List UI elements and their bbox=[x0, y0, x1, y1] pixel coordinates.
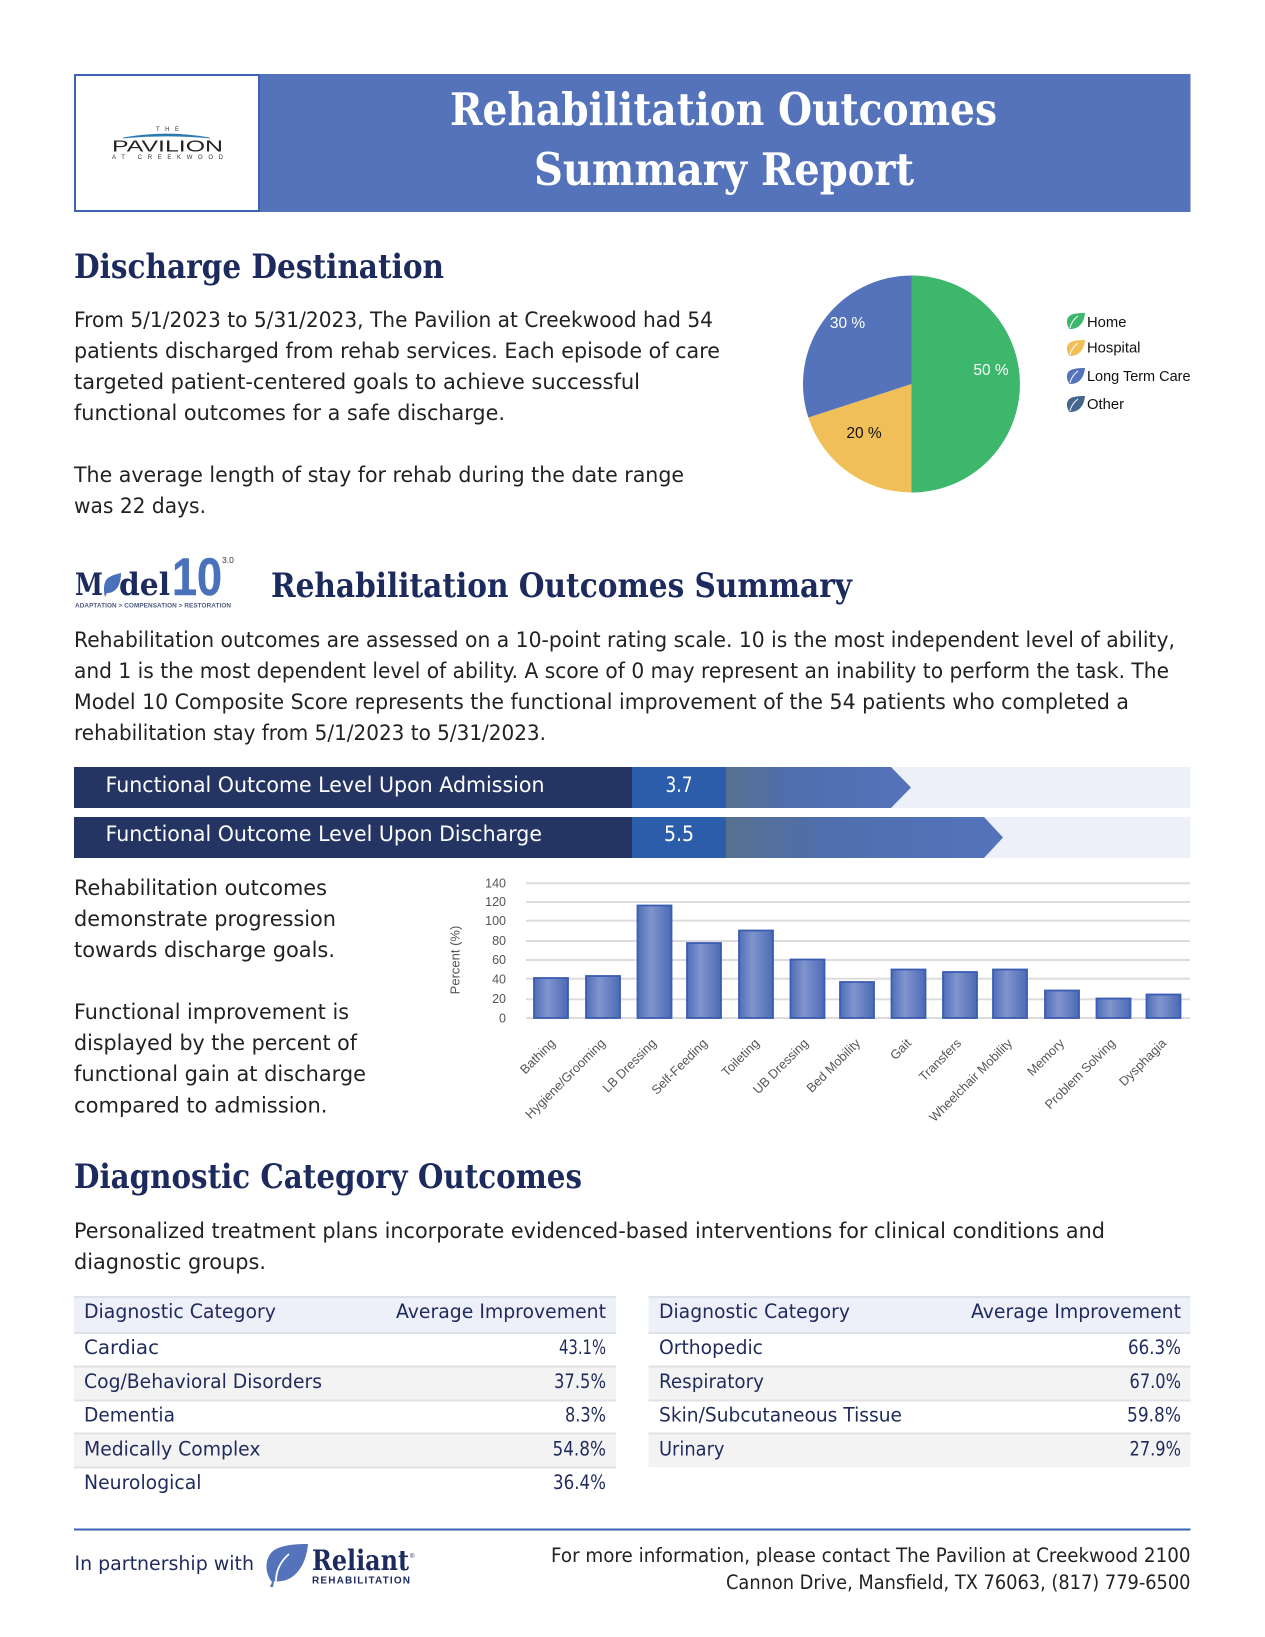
progress bar: discharge level: Functional Outcome Level Upon Discharge bbox=[106, 822, 542, 846]
table: diagnostic categories left: 36.4% bbox=[553, 1471, 606, 1494]
table: diagnostic categories right: Respiratory bbox=[659, 1370, 764, 1393]
x-axis labels: Gait bbox=[887, 1035, 914, 1063]
logo: Reliant Rehabilitation: ® bbox=[410, 1553, 415, 1560]
logo panel: The Pavilion at Creekwood: AT CREEKWOOD bbox=[112, 155, 224, 161]
y-axis labels: 120 bbox=[485, 895, 506, 909]
y-axis labels: 40 bbox=[492, 972, 506, 986]
legend item: Other: Other bbox=[1087, 397, 1124, 413]
text block: discharge summary bbox=[73, 308, 720, 518]
table: diagnostic categories right: 27.9% bbox=[1130, 1438, 1181, 1460]
text block: discharge summary: The average length of stay for rehab during the date range bbox=[73, 463, 684, 487]
logo: Model 10: 3.0 bbox=[222, 555, 234, 565]
y-axis labels bbox=[485, 876, 506, 1026]
logo: Model 10: 10 bbox=[172, 548, 222, 607]
table: diagnostic categories left: Diagnostic Category bbox=[84, 1300, 276, 1323]
logo panel: The Pavilion at Creekwood bbox=[75, 75, 259, 211]
text block: rating scale description: rehabilitation stay from 5/1/2023 to 5/31/2023. bbox=[74, 721, 546, 745]
text block: progression: compared to admission. bbox=[74, 1094, 328, 1118]
report title: Summary Report bbox=[534, 143, 914, 196]
table: diagnostic categories left: Average Improvement bbox=[396, 1300, 606, 1323]
x-axis labels: Bathing bbox=[517, 1036, 558, 1077]
text block: progression: Rehabilitation outcomes bbox=[74, 876, 327, 900]
progress bar: admission level: Functional Outcome Level Upon Admission bbox=[106, 773, 544, 797]
table: diagnostic categories right: Average Improvement bbox=[971, 1300, 1181, 1323]
footer: partnership: In partnership with bbox=[74, 1552, 254, 1575]
text block: progression: demonstrate progression bbox=[74, 907, 336, 931]
x-axis labels: UB Dressing bbox=[750, 1036, 811, 1097]
table: diagnostic categories right: Orthopedic bbox=[659, 1336, 763, 1359]
heading: Rehabilitation Outcomes Summary: Rehabilitation Outcomes Summary bbox=[271, 566, 853, 606]
footer: contact information: Cannon Drive, Mansfield, TX 76063, (817) 779-6500 bbox=[726, 1571, 1190, 1594]
text block: treatment plans bbox=[74, 1219, 1105, 1274]
report title: Rehabilitation Outcomes bbox=[450, 83, 997, 136]
legend item: Home: Home bbox=[1087, 315, 1126, 331]
progress bar: admission level: 3.7 bbox=[666, 773, 692, 797]
text block: discharge summary: targeted patient-centered goals to achieve successful bbox=[74, 370, 640, 394]
table: diagnostic categories left: Cog/Behavioral Disorders bbox=[84, 1370, 322, 1393]
y-axis labels: 0 bbox=[499, 1012, 506, 1026]
table: diagnostic categories left bbox=[74, 1296, 616, 1494]
text block: treatment plans: Personalized treatment plans incorporate evidenced-based interventions for clinical conditions and bbox=[74, 1219, 1105, 1243]
table: diagnostic categories left: 37.5% bbox=[554, 1370, 606, 1393]
text block: progression: functional gain at discharge bbox=[74, 1062, 366, 1086]
x-axis labels: Hygiene/Grooming bbox=[522, 1036, 608, 1122]
progress bar: admission level bbox=[74, 767, 1190, 808]
footer: contact information: For more information, please contact The Pavilion at Creekwood 2100 bbox=[551, 1544, 1190, 1567]
y-axis labels: 80 bbox=[492, 934, 506, 948]
text block: discharge summary: functional outcomes for a safe discharge. bbox=[74, 401, 505, 425]
progress bar: discharge level: 5.5 bbox=[664, 822, 694, 846]
bar chart: functional gain percent by task bbox=[448, 876, 1190, 1125]
pie chart: discharge destination bbox=[803, 276, 1020, 492]
y-axis labels: 140 bbox=[485, 876, 506, 890]
text block: discharge summary: was 22 days. bbox=[74, 494, 206, 518]
bars bbox=[534, 906, 1180, 1018]
x-axis labels: Toileting bbox=[718, 1036, 762, 1079]
footer: partnership bbox=[74, 1544, 415, 1587]
table: diagnostic categories left: 8.3% bbox=[565, 1404, 606, 1426]
table: diagnostic categories right bbox=[648, 1296, 1190, 1467]
table: diagnostic categories left: Neurological bbox=[84, 1471, 202, 1494]
pie chart: discharge destination: 30 % bbox=[830, 315, 865, 332]
y-axis labels: 20 bbox=[492, 992, 506, 1006]
table: diagnostic categories right: Urinary bbox=[659, 1438, 724, 1460]
legend: discharge destination bbox=[1067, 313, 1190, 414]
table: diagnostic categories right: Skin/Subcutaneous Tissue bbox=[659, 1404, 902, 1426]
logo panel: The Pavilion at Creekwood: PAVILION bbox=[112, 138, 223, 156]
text block: treatment plans: diagnostic groups. bbox=[74, 1250, 266, 1274]
x-axis labels bbox=[517, 1035, 1170, 1125]
table: diagnostic categories left: 43.1% bbox=[559, 1336, 606, 1359]
heading: Discharge Destination: Discharge Destination bbox=[74, 247, 444, 287]
text block: discharge summary: From 5/1/2023 to 5/31/2023, The Pavilion at Creekwood had 54 bbox=[74, 308, 713, 332]
text block: discharge summary: patients discharged from rehab services. Each episode of care bbox=[74, 339, 720, 363]
y-axis title: Percent (%) bbox=[448, 926, 462, 994]
logo panel: The Pavilion at Creekwood: THE bbox=[156, 127, 179, 133]
logo: Model 10: M bbox=[75, 567, 103, 603]
table: diagnostic categories right: Diagnostic Category bbox=[659, 1300, 850, 1323]
table: diagnostic categories right: 67.0% bbox=[1130, 1370, 1181, 1393]
x-axis labels: Self-Feeding bbox=[648, 1036, 710, 1097]
progress bar: discharge level bbox=[74, 817, 1190, 858]
icon: Reliant leaf bbox=[266, 1544, 308, 1587]
x-axis labels: Transfers bbox=[916, 1036, 964, 1084]
x-axis labels: Memory bbox=[1024, 1035, 1068, 1079]
x-axis labels: Bed Mobility bbox=[803, 1035, 864, 1095]
heading: Diagnostic Category Outcomes: Diagnostic Category Outcomes bbox=[74, 1157, 582, 1197]
text block: progression: Functional improvement is bbox=[74, 1000, 349, 1024]
text block: progression: towards discharge goals. bbox=[74, 938, 335, 962]
logo: Model 10 bbox=[75, 548, 234, 610]
text block: rating scale description bbox=[74, 628, 1175, 745]
legend item: Hospital: Hospital bbox=[1087, 340, 1140, 356]
logo: Reliant Rehabilitation: REHABILITATION bbox=[312, 1576, 410, 1586]
legend item: Long Term Care: Long Term Care bbox=[1087, 369, 1190, 385]
text block: rating scale description: Model 10 Composite Score represents the functional improvement of the 54 patients who completed a bbox=[74, 690, 1129, 714]
pie chart: discharge destination: 20 % bbox=[846, 425, 882, 442]
text block: progression bbox=[74, 876, 366, 1118]
table: diagnostic categories left: 54.8% bbox=[552, 1438, 606, 1460]
x-axis labels: Dysphagia bbox=[1116, 1035, 1170, 1089]
x-axis labels: Wheelchair Mobility bbox=[926, 1035, 1016, 1125]
logo: Model 10: ADAPTATION > COMPENSATION > RESTORATION bbox=[75, 602, 231, 610]
y-axis labels: 60 bbox=[492, 953, 506, 967]
x-axis labels: Problem Solving bbox=[1042, 1036, 1118, 1112]
y-axis labels: 100 bbox=[485, 914, 506, 928]
table: diagnostic categories right: 59.8% bbox=[1127, 1404, 1181, 1426]
table: diagnostic categories right: 66.3% bbox=[1128, 1336, 1181, 1359]
table: diagnostic categories left: Cardiac bbox=[84, 1336, 159, 1359]
logo: Reliant Rehabilitation: Reliant bbox=[312, 1544, 409, 1577]
text block: rating scale description: and 1 is the most dependent level of ability. A score of 0 may represent an inability to perform the task. The bbox=[74, 659, 1169, 683]
text block: rating scale description: Rehabilitation outcomes are assessed on a 10-point rating scale. 10 is the most independent level of ability, bbox=[74, 628, 1175, 652]
table: diagnostic categories left: Dementia bbox=[84, 1404, 175, 1426]
text block: progression: displayed by the percent of bbox=[74, 1031, 358, 1055]
pie chart: discharge destination: 50 % bbox=[973, 362, 1009, 379]
report title bbox=[450, 83, 997, 196]
x-axis labels: LB Dressing bbox=[599, 1036, 659, 1095]
header banner bbox=[74, 74, 1190, 212]
logo: Model 10: del bbox=[119, 567, 170, 603]
table: diagnostic categories left: Medically Complex bbox=[84, 1438, 260, 1460]
footer: contact information bbox=[551, 1544, 1190, 1594]
